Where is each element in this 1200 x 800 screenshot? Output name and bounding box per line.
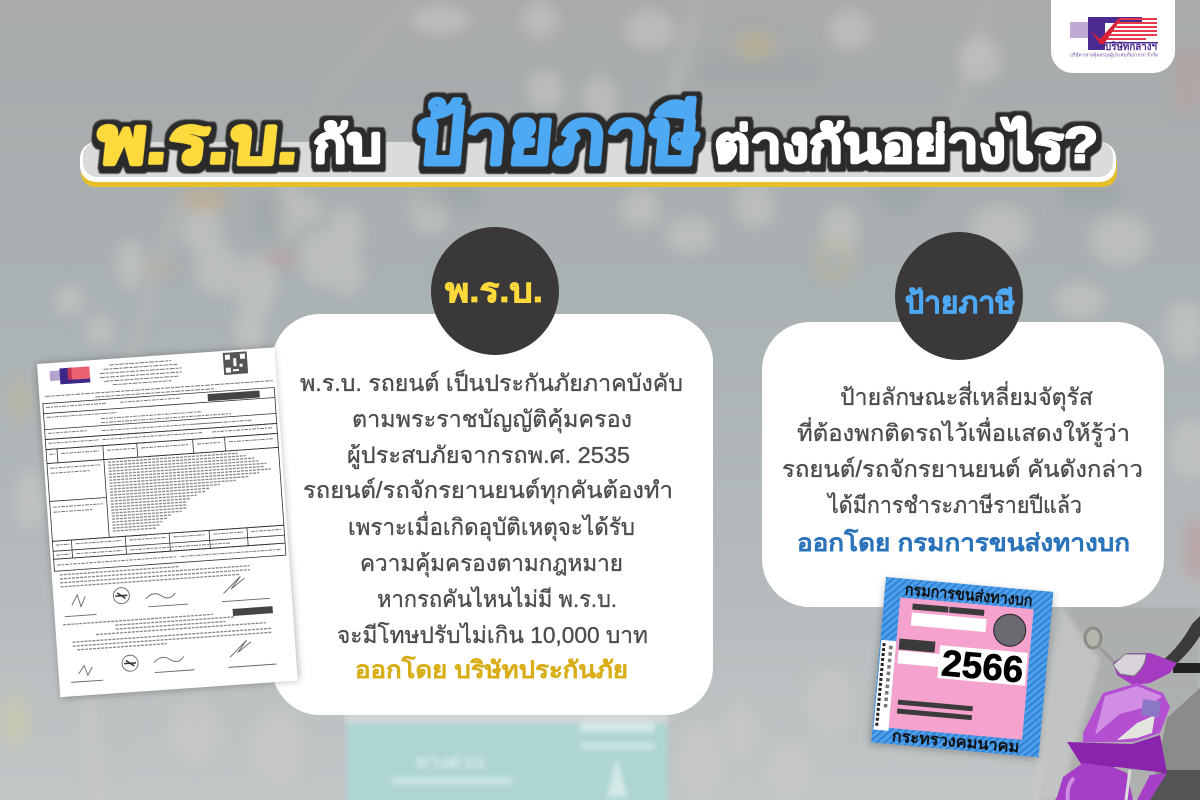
- QR code: [223, 351, 248, 375]
- policy text block: [52, 451, 283, 651]
- windshield panel: [1117, 715, 1155, 740]
- barcode: [208, 391, 275, 617]
- department name: กรมการขนส่งทางบก: [904, 582, 1033, 610]
- insurer logo: [49, 366, 90, 385]
- heading: ต่างกันอย่างไร?: [714, 116, 1098, 173]
- panel: ป้ายภาษี description: [762, 322, 1164, 607]
- logo mark: บริษัท กลางคุ้มครองผู้ประสบภัยจากรถ จำกัด: [1070, 52, 1158, 58]
- badge: พ.ร.บ.: [431, 227, 559, 355]
- heading: [94, 95, 1098, 180]
- handlebar: [1163, 616, 1200, 666]
- light wedge behind scooter: [1040, 607, 1200, 800]
- logo mark: [1070, 17, 1158, 58]
- heading: ป้ายภาษี: [412, 95, 704, 180]
- body text: รถยนต์/รถจักรยานยนต์ คันดังกล่าว: [782, 456, 1143, 482]
- body text: จะมีโทษปรับไม่เกิน 10,000 บาท: [337, 622, 648, 648]
- body text: [782, 381, 1143, 557]
- grey seal: [992, 613, 1027, 648]
- body text: ที่ต้องพกติดรถไว้เพื่อแสดงให้รู้ว่า: [797, 417, 1130, 447]
- green road sign: [345, 714, 667, 800]
- logo mark: บริษัทกลางฯ: [1105, 41, 1157, 53]
- logo card: [1051, 0, 1175, 73]
- scooter illustration: [1055, 616, 1200, 800]
- heading: พ.ร.บ.: [94, 105, 303, 177]
- badge: ป้ายภาษี: ป้ายภาษี: [905, 287, 1015, 320]
- body text: ตามพระราชบัญญัติคุ้มครอง: [352, 406, 632, 433]
- banner bar: [80, 142, 1117, 187]
- green road sign: ทางด่วน: [416, 752, 484, 773]
- header text lines: [43, 354, 273, 400]
- badge: ป้ายภาษี: [895, 232, 1023, 360]
- tax disc sticker: [866, 576, 1058, 762]
- front shield: [1083, 683, 1170, 742]
- lower skirt: [1067, 735, 1167, 773]
- panel: พ.ร.บ. description: [272, 314, 713, 715]
- body text: ป้ายลักษณะสี่เหลี่ยมจัตุรัส: [840, 381, 1093, 411]
- headlight cowl: [1113, 653, 1177, 685]
- body text: เพราะเมื่อเกิดอุบัติเหตุจะได้รับ: [348, 511, 635, 541]
- document: พ.ร.บ. insurance form: [34, 232, 530, 702]
- year plate: 2566: [940, 642, 1025, 690]
- body text: ได้มีการชำระภาษีรายปีแล้ว: [826, 492, 1082, 518]
- scooter rear: [1150, 688, 1200, 800]
- body text: ผู้ประสบภัยจากรถพ.ศ. 2535: [347, 442, 630, 469]
- table small text: [46, 392, 283, 565]
- body text: ออกโดย กรมการขนส่งทางบก: [797, 528, 1130, 557]
- body text: รถยนต์/รถจักรยานยนต์ทุกคันต้องทำ: [303, 477, 673, 504]
- front fender and fork: [1055, 763, 1133, 800]
- body text: [300, 368, 683, 684]
- ministry name: กระทรวงคมนาคม: [891, 728, 1020, 756]
- body text: ออกโดย บริษัทประกันภัย: [355, 655, 628, 684]
- mirror: [1085, 628, 1116, 664]
- bars and white fields: [912, 603, 949, 613]
- body text: พ.ร.บ. รถยนต์ เป็นประกันภัยภาคบังคับ: [300, 368, 683, 396]
- perforated stub: [873, 640, 896, 731]
- title banner: [80, 90, 1117, 187]
- pink field: [889, 597, 1034, 740]
- body text: หากรถคันไหนไม่มี พ.ร.บ.: [377, 586, 617, 612]
- heading: กับ: [313, 117, 382, 173]
- body text: ความคุ้มครองตามกฎหมาย: [360, 550, 623, 577]
- form tables: [43, 388, 286, 571]
- signatures and stamps: [63, 574, 277, 683]
- badge: พ.ร.บ.: พ.ร.บ.: [445, 272, 543, 310]
